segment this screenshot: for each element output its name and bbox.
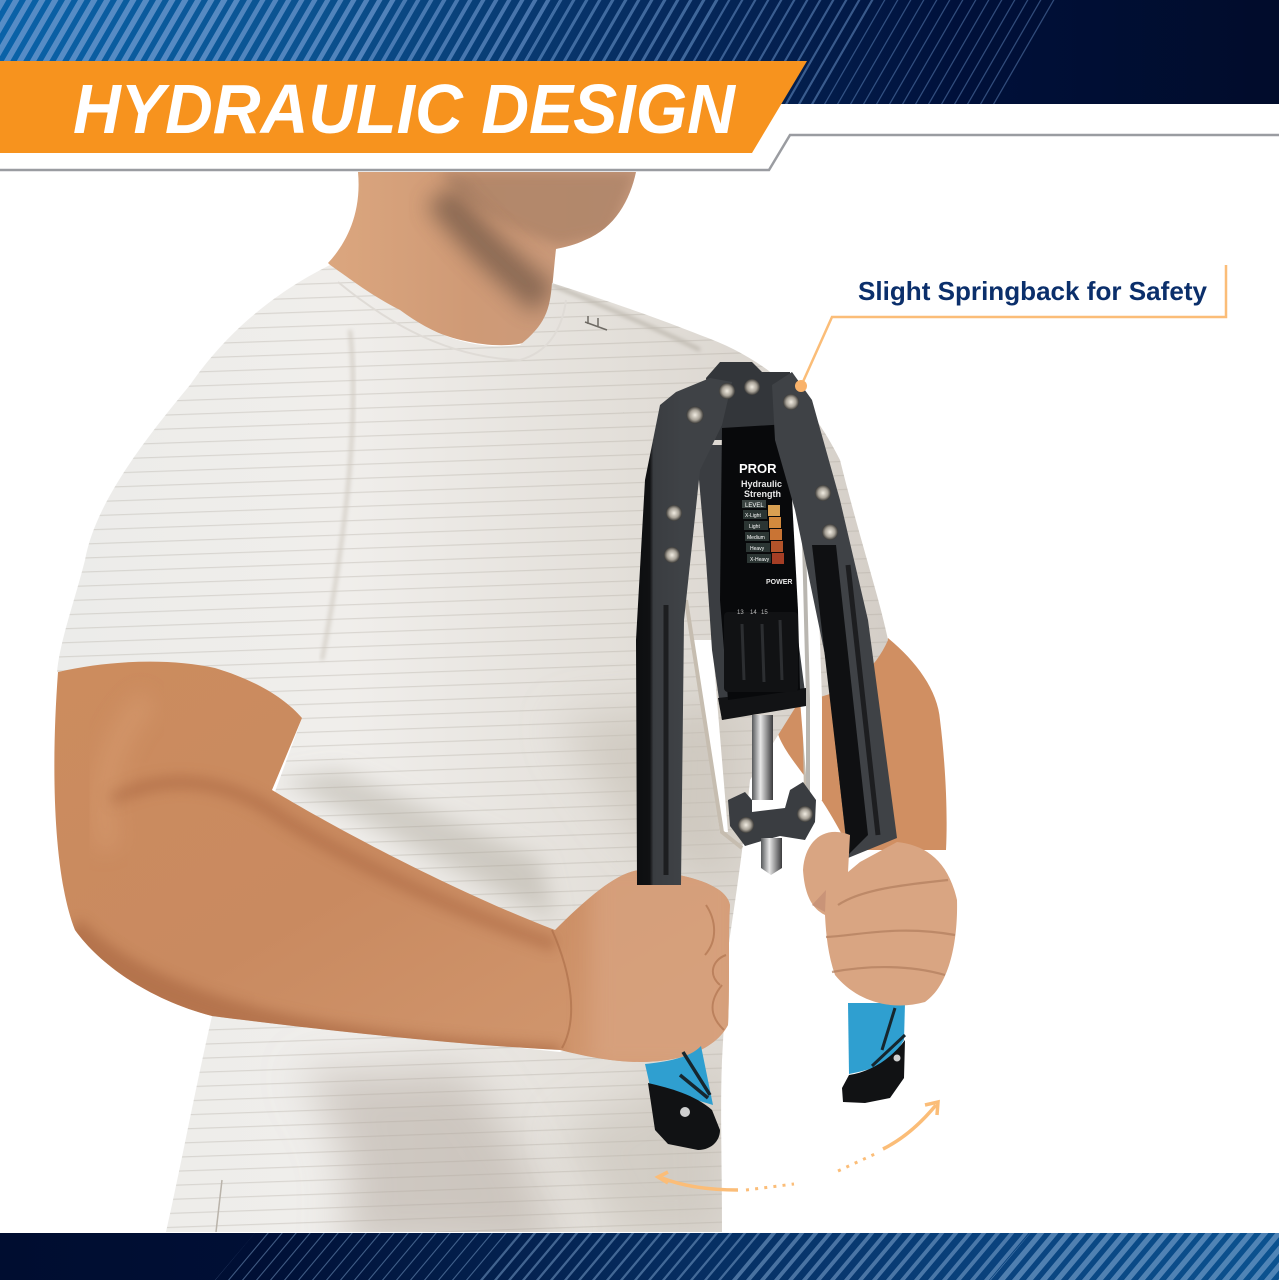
right lever [772, 372, 897, 858]
right hand on handle [803, 832, 957, 1006]
adjustment knob [724, 612, 798, 692]
title white backing [0, 104, 1279, 170]
hydraulic cylinder [720, 424, 800, 700]
arrow: return motion right [838, 1102, 938, 1171]
banner stripes: thick to thin [0, 0, 240, 104]
title ribbon [0, 61, 807, 153]
right lever lower band [812, 545, 868, 855]
bottom stripes: thin to thick [215, 1233, 520, 1280]
white gap beside strap [693, 640, 728, 832]
piston [752, 715, 773, 800]
banner background [0, 0, 1279, 104]
left grip [645, 1046, 720, 1150]
hydraulic cylinder: 14 [750, 610, 757, 616]
end bolt [761, 838, 782, 875]
hydraulic cylinder: Heavy [750, 546, 765, 552]
arrow: return motion left [658, 1172, 794, 1190]
shirt [57, 265, 888, 1232]
thin strap wires [686, 600, 806, 848]
label text: PROR [739, 461, 777, 476]
level table [742, 500, 766, 508]
hydraulic strengthener [636, 362, 905, 1150]
hydraulic cylinder: X-Heavy [750, 557, 770, 563]
hydraulic cylinder: X-Light [745, 513, 761, 519]
hydraulic cylinder: 13 [737, 610, 744, 616]
model figure [0, 170, 947, 1250]
right grip [842, 1003, 905, 1103]
hydraulic cylinder: Hydraulic [741, 479, 782, 489]
hydraulic cylinder: Medium [747, 535, 765, 541]
front arm and fist [40, 650, 740, 1070]
bottom banner [0, 1233, 1279, 1280]
left lever [636, 378, 732, 885]
head plate [706, 362, 790, 440]
hydraulic cylinder: POWER [766, 579, 792, 586]
collar ribbing [338, 282, 566, 360]
callout text: Slight Springback for Safety [858, 276, 1208, 306]
hydraulic cylinder: Light [749, 524, 760, 530]
fist creases [552, 905, 726, 1048]
shirt seam tag [585, 316, 607, 330]
neck and chin [328, 172, 636, 346]
hydraulic cylinder: 15 [761, 610, 768, 616]
callout: slight springback [795, 265, 1226, 392]
screws [664, 379, 838, 833]
centre body plate [696, 445, 806, 720]
rear forearm [775, 638, 947, 850]
title: HYDRAULIC DESIGN [73, 70, 736, 148]
left lever groove [664, 605, 668, 875]
title rule [0, 135, 1279, 170]
right side gap [792, 495, 822, 800]
callout dot [795, 380, 807, 392]
top banner [0, 0, 1279, 104]
lower clamp [728, 782, 816, 846]
callout leader line [802, 265, 1226, 384]
bottom background [0, 1233, 1279, 1280]
right lever groove [848, 565, 878, 835]
hydraulic cylinder: LEVEL [745, 503, 764, 509]
hydraulic cylinder: Strength [744, 489, 781, 499]
